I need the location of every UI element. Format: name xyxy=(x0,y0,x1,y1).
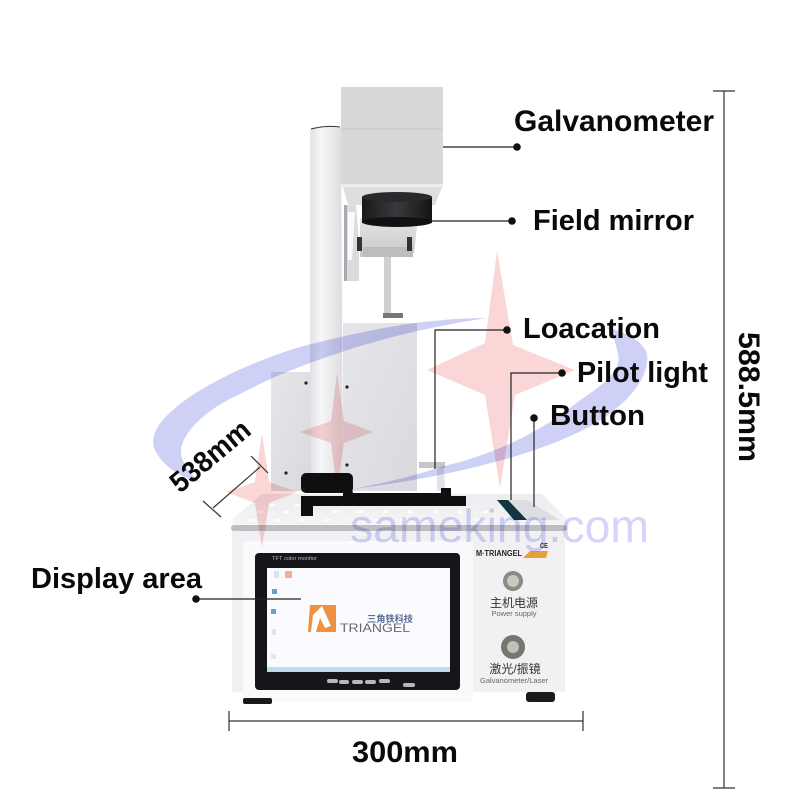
monitor xyxy=(255,553,460,690)
plate edge xyxy=(231,525,567,531)
small star xyxy=(226,433,297,548)
medium star xyxy=(300,373,373,490)
dimension: depth 538mm: 538mm xyxy=(164,414,257,499)
main column box xyxy=(343,323,417,491)
monitor buttons xyxy=(327,679,415,687)
logo cjk: 三角铁科技 xyxy=(367,613,413,624)
large star xyxy=(427,251,575,488)
monitor caption: TFT color monitor xyxy=(272,556,317,562)
label: Display area: Display area xyxy=(31,563,203,595)
watermark: red stars xyxy=(226,251,575,548)
label: Pilot light xyxy=(511,357,708,500)
label: Field mirror xyxy=(431,205,694,237)
power connector xyxy=(503,571,523,591)
right control panel xyxy=(476,541,549,685)
label: Galvanometer xyxy=(443,105,714,151)
pointer rod xyxy=(383,257,403,318)
label: Pilot light: Pilot light xyxy=(577,357,708,389)
machine: base unit xyxy=(231,462,568,704)
label: Galvanometer: Galvanometer xyxy=(514,105,714,138)
galvanometer housing xyxy=(341,87,443,205)
logo xyxy=(308,605,413,635)
pillar xyxy=(310,126,343,490)
laser label: 激光/振镜 xyxy=(489,661,541,676)
rear side box xyxy=(271,372,311,491)
dimension: width 300mm xyxy=(229,711,583,769)
left L bracket xyxy=(344,205,359,281)
desktop icons xyxy=(271,571,292,659)
power label: 主机电源 xyxy=(490,596,538,610)
dimension: height 588.5mm xyxy=(713,91,765,788)
brand stripe xyxy=(523,551,548,558)
field mirror lens xyxy=(362,192,432,227)
label: Display area xyxy=(31,563,301,603)
plate holes xyxy=(250,505,500,520)
label: Button xyxy=(530,400,645,507)
watermark: blue swoosh xyxy=(153,318,647,489)
power label english: Power supply xyxy=(491,609,537,618)
control pad on plate xyxy=(497,500,560,520)
dimension: width 300mm: 300mm xyxy=(352,736,458,769)
dimension: height 588.5mm: 588.5mm xyxy=(732,332,765,462)
label: Button: Button xyxy=(550,400,645,432)
location block xyxy=(419,462,445,491)
feet xyxy=(243,692,555,704)
watermark: sameking.com: sameking.com xyxy=(350,500,649,552)
machine: upper column and galvanometer xyxy=(271,87,443,491)
monitor bezel panel xyxy=(243,541,473,702)
brand: M·TRIANGEL xyxy=(476,549,522,558)
front body xyxy=(232,531,565,692)
CE mark: CE xyxy=(540,541,548,550)
screen xyxy=(267,568,450,672)
fixing screws xyxy=(284,381,349,475)
top plate xyxy=(232,494,568,529)
black jig xyxy=(301,473,466,516)
bracket under lens xyxy=(357,218,417,257)
laser label english: Galvanometer/Laser xyxy=(480,676,549,685)
label: Field mirror: Field mirror xyxy=(533,205,694,237)
label: Loacation xyxy=(435,313,660,469)
label: Loacation: Loacation xyxy=(523,313,660,345)
laser connector xyxy=(501,635,525,659)
taskbar xyxy=(267,667,450,672)
logo text: TRIANGEL xyxy=(340,621,410,635)
